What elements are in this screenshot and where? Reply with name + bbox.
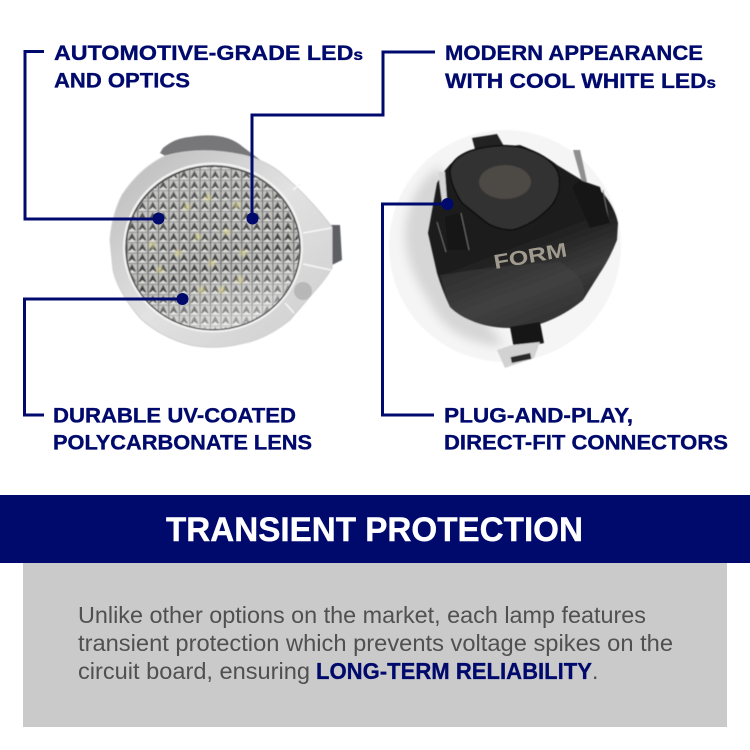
- label: UV-coated lens: [53, 404, 312, 454]
- connector highlights: [437, 182, 609, 252]
- product photo: back of lamp: [389, 130, 621, 368]
- banner: transient protection: [0, 495, 750, 563]
- clip slot: [511, 353, 531, 363]
- body text: .: [592, 658, 598, 684]
- label: automotive-grade LEDs: AUTOMOTIVE-GRADE LED s: [54, 41, 363, 65]
- label: UV-coated lens: DURABLE UV-COATED: [53, 404, 296, 428]
- right connector base: [572, 180, 610, 228]
- body text: Unlike other options on the market, each lamp features: [78, 602, 646, 628]
- callout line: UV-coated lens: [24, 293, 188, 415]
- clear housing shade: [405, 165, 505, 346]
- label: connectors: [444, 404, 728, 454]
- label: automotive-grade LEDs: [54, 41, 363, 92]
- top clip: [472, 134, 505, 153]
- bottom clip: [510, 322, 544, 349]
- lens rim: [126, 166, 300, 330]
- label: UV-coated lens: POLYCARBONATE LENS: [53, 430, 312, 454]
- banner heading: TRANSIENT PROTECTION: [166, 511, 583, 549]
- FORM logo: FORM: [492, 239, 569, 274]
- body text: LONG-TERM RELIABILITY: [316, 658, 592, 684]
- cap centre disc: [479, 165, 531, 199]
- label: connectors: PLUG-AND-PLAY,: [444, 404, 633, 428]
- rear dark housing: [160, 135, 263, 175]
- left connector base: [445, 213, 468, 250]
- clear housing: [110, 151, 332, 347]
- side tab: [330, 225, 342, 266]
- panel: description: [23, 563, 727, 727]
- round cap: [450, 146, 560, 230]
- body text: circuit board, ensuring: [78, 658, 310, 684]
- label: modern appearance: MODERN APPEARANCE: [445, 41, 703, 65]
- LED dots: [149, 195, 246, 293]
- body text: transient protection which prevents voltage spikes on the: [78, 630, 673, 656]
- housing dimple: [294, 282, 312, 300]
- product photo: front lens of lamp: [110, 135, 342, 347]
- body text: [78, 602, 673, 684]
- housing facets: [285, 184, 331, 313]
- callout line: connectors: [382, 198, 454, 415]
- label: modern appearance: [445, 41, 716, 93]
- body seam highlight: [440, 262, 584, 328]
- callout line: automotive-grade LEDs: [25, 52, 164, 224]
- label: modern appearance: WITH COOL WHITE LED s: [445, 69, 716, 93]
- label: connectors: DIRECT-FIT CONNECTORS: [444, 430, 728, 454]
- lens bright fade: [127, 167, 299, 329]
- right connector pin: [573, 150, 587, 182]
- callout line: modern appearance: [246, 52, 435, 224]
- left connector pin: [438, 172, 447, 202]
- pale translucent halo: [389, 130, 621, 362]
- black body: [428, 145, 618, 328]
- label: automotive-grade LEDs: AND OPTICS: [54, 68, 190, 92]
- lens: [127, 167, 299, 329]
